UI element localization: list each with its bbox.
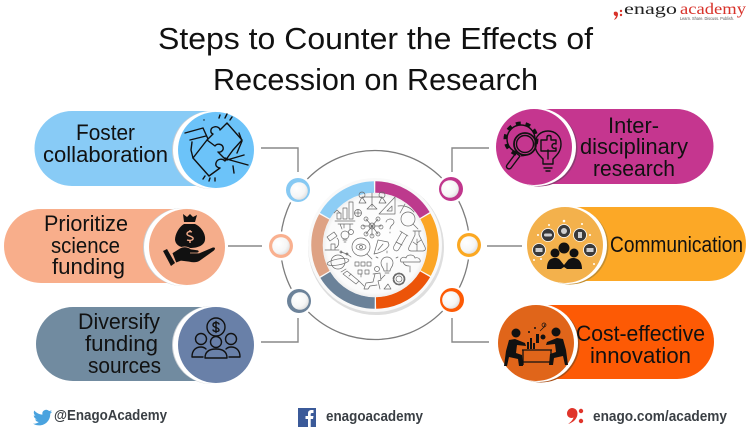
icon: tree flask: [409, 231, 425, 251]
panel: communication: [527, 206, 746, 284]
label: interdisciplinary research: Inter-: [608, 113, 659, 138]
icon: cloud and umbrella: [401, 255, 420, 272]
icon: workers at a table: [504, 323, 568, 366]
icon: gear magnifier and bulb: [505, 123, 561, 171]
label: diversify funding sources: Diversify: [78, 309, 160, 334]
icon: question mark: [386, 219, 394, 233]
icon: kneeling worker: [364, 266, 391, 289]
label: cost-effective innovation: innovation: [590, 343, 691, 368]
logo: enago academy: academy: [680, 1, 746, 18]
panel: prioritize science funding: [4, 208, 225, 286]
title: Steps to Counter the Effects of: [158, 21, 593, 56]
label: cost-effective innovation: [576, 321, 705, 368]
icon: money bag in hand: [163, 214, 215, 266]
icon: hanging bulb: [338, 224, 354, 242]
icon: twitter bird: [33, 410, 52, 425]
label: interdisciplinary research: research: [593, 156, 675, 181]
icon: magnifier and pick: [398, 204, 418, 229]
label: foster collaboration: [43, 120, 168, 167]
logo: enago academy: [614, 1, 746, 21]
icon: people with media bubbles: [532, 220, 596, 269]
panel: diversify funding sources: [36, 306, 254, 384]
connector lines: [228, 148, 522, 342]
icon: eye magnifier: [352, 238, 372, 259]
label: foster collaboration: Foster: [76, 120, 135, 145]
label: diversify funding sources: [78, 309, 161, 378]
icon: enago mark: [567, 408, 583, 424]
label: diversify funding sources: sources: [88, 353, 161, 378]
icon: puzzle hands: [185, 114, 248, 181]
icon: test tube: [394, 231, 408, 251]
ring node dots: [266, 174, 484, 316]
icon: protractor: [374, 240, 389, 254]
icon: boxes: [355, 262, 371, 277]
central research doodle icons: [325, 192, 425, 289]
label: cost-effective innovation: Cost-effective: [576, 321, 705, 346]
icon: planet: [327, 251, 351, 269]
label: prioritize science funding: science: [51, 233, 120, 258]
label: prioritize science funding: [44, 211, 128, 279]
panel: cost-effective innovation: [498, 304, 714, 382]
panel: interdisciplinary research: [496, 108, 714, 186]
label: prioritize science funding: Prioritize: [44, 211, 128, 236]
icon: light bulb: [376, 251, 398, 273]
panel: foster collaboration: [35, 111, 254, 189]
footer: website: enago.com/academy: [593, 408, 728, 425]
icon: gear: [394, 274, 404, 284]
central donut: [296, 166, 454, 324]
logo: enago academy: enago: [624, 1, 677, 18]
title: [158, 21, 593, 97]
footer: facebook: [298, 408, 424, 427]
icon: syringe: [341, 269, 364, 286]
label: interdisciplinary research: disciplinary: [580, 134, 688, 159]
title: Recession on Research: [213, 62, 538, 97]
icon: facebook: [298, 408, 316, 427]
icon: microscope: [325, 232, 339, 250]
icon: people and dollar: [192, 318, 240, 358]
icon: bar chart: [334, 202, 355, 221]
label: prioritize science funding: funding: [52, 254, 125, 279]
label: diversify funding sources: funding: [85, 331, 158, 356]
label: interdisciplinary research: [580, 113, 688, 181]
logo: enago academy: Learn. Share. Discuss. Publish.: [680, 16, 734, 21]
footer: facebook: enagoacademy: [326, 408, 424, 425]
label: foster collaboration: collaboration: [43, 142, 168, 167]
icon: small globe: [354, 210, 362, 216]
footer: twitter handle: @EnagoAcademy: [54, 407, 168, 424]
icon: set square: [379, 197, 395, 214]
outer ring: [280, 150, 470, 340]
icon: molecule network: [361, 217, 383, 238]
icon: scales: [359, 192, 386, 209]
